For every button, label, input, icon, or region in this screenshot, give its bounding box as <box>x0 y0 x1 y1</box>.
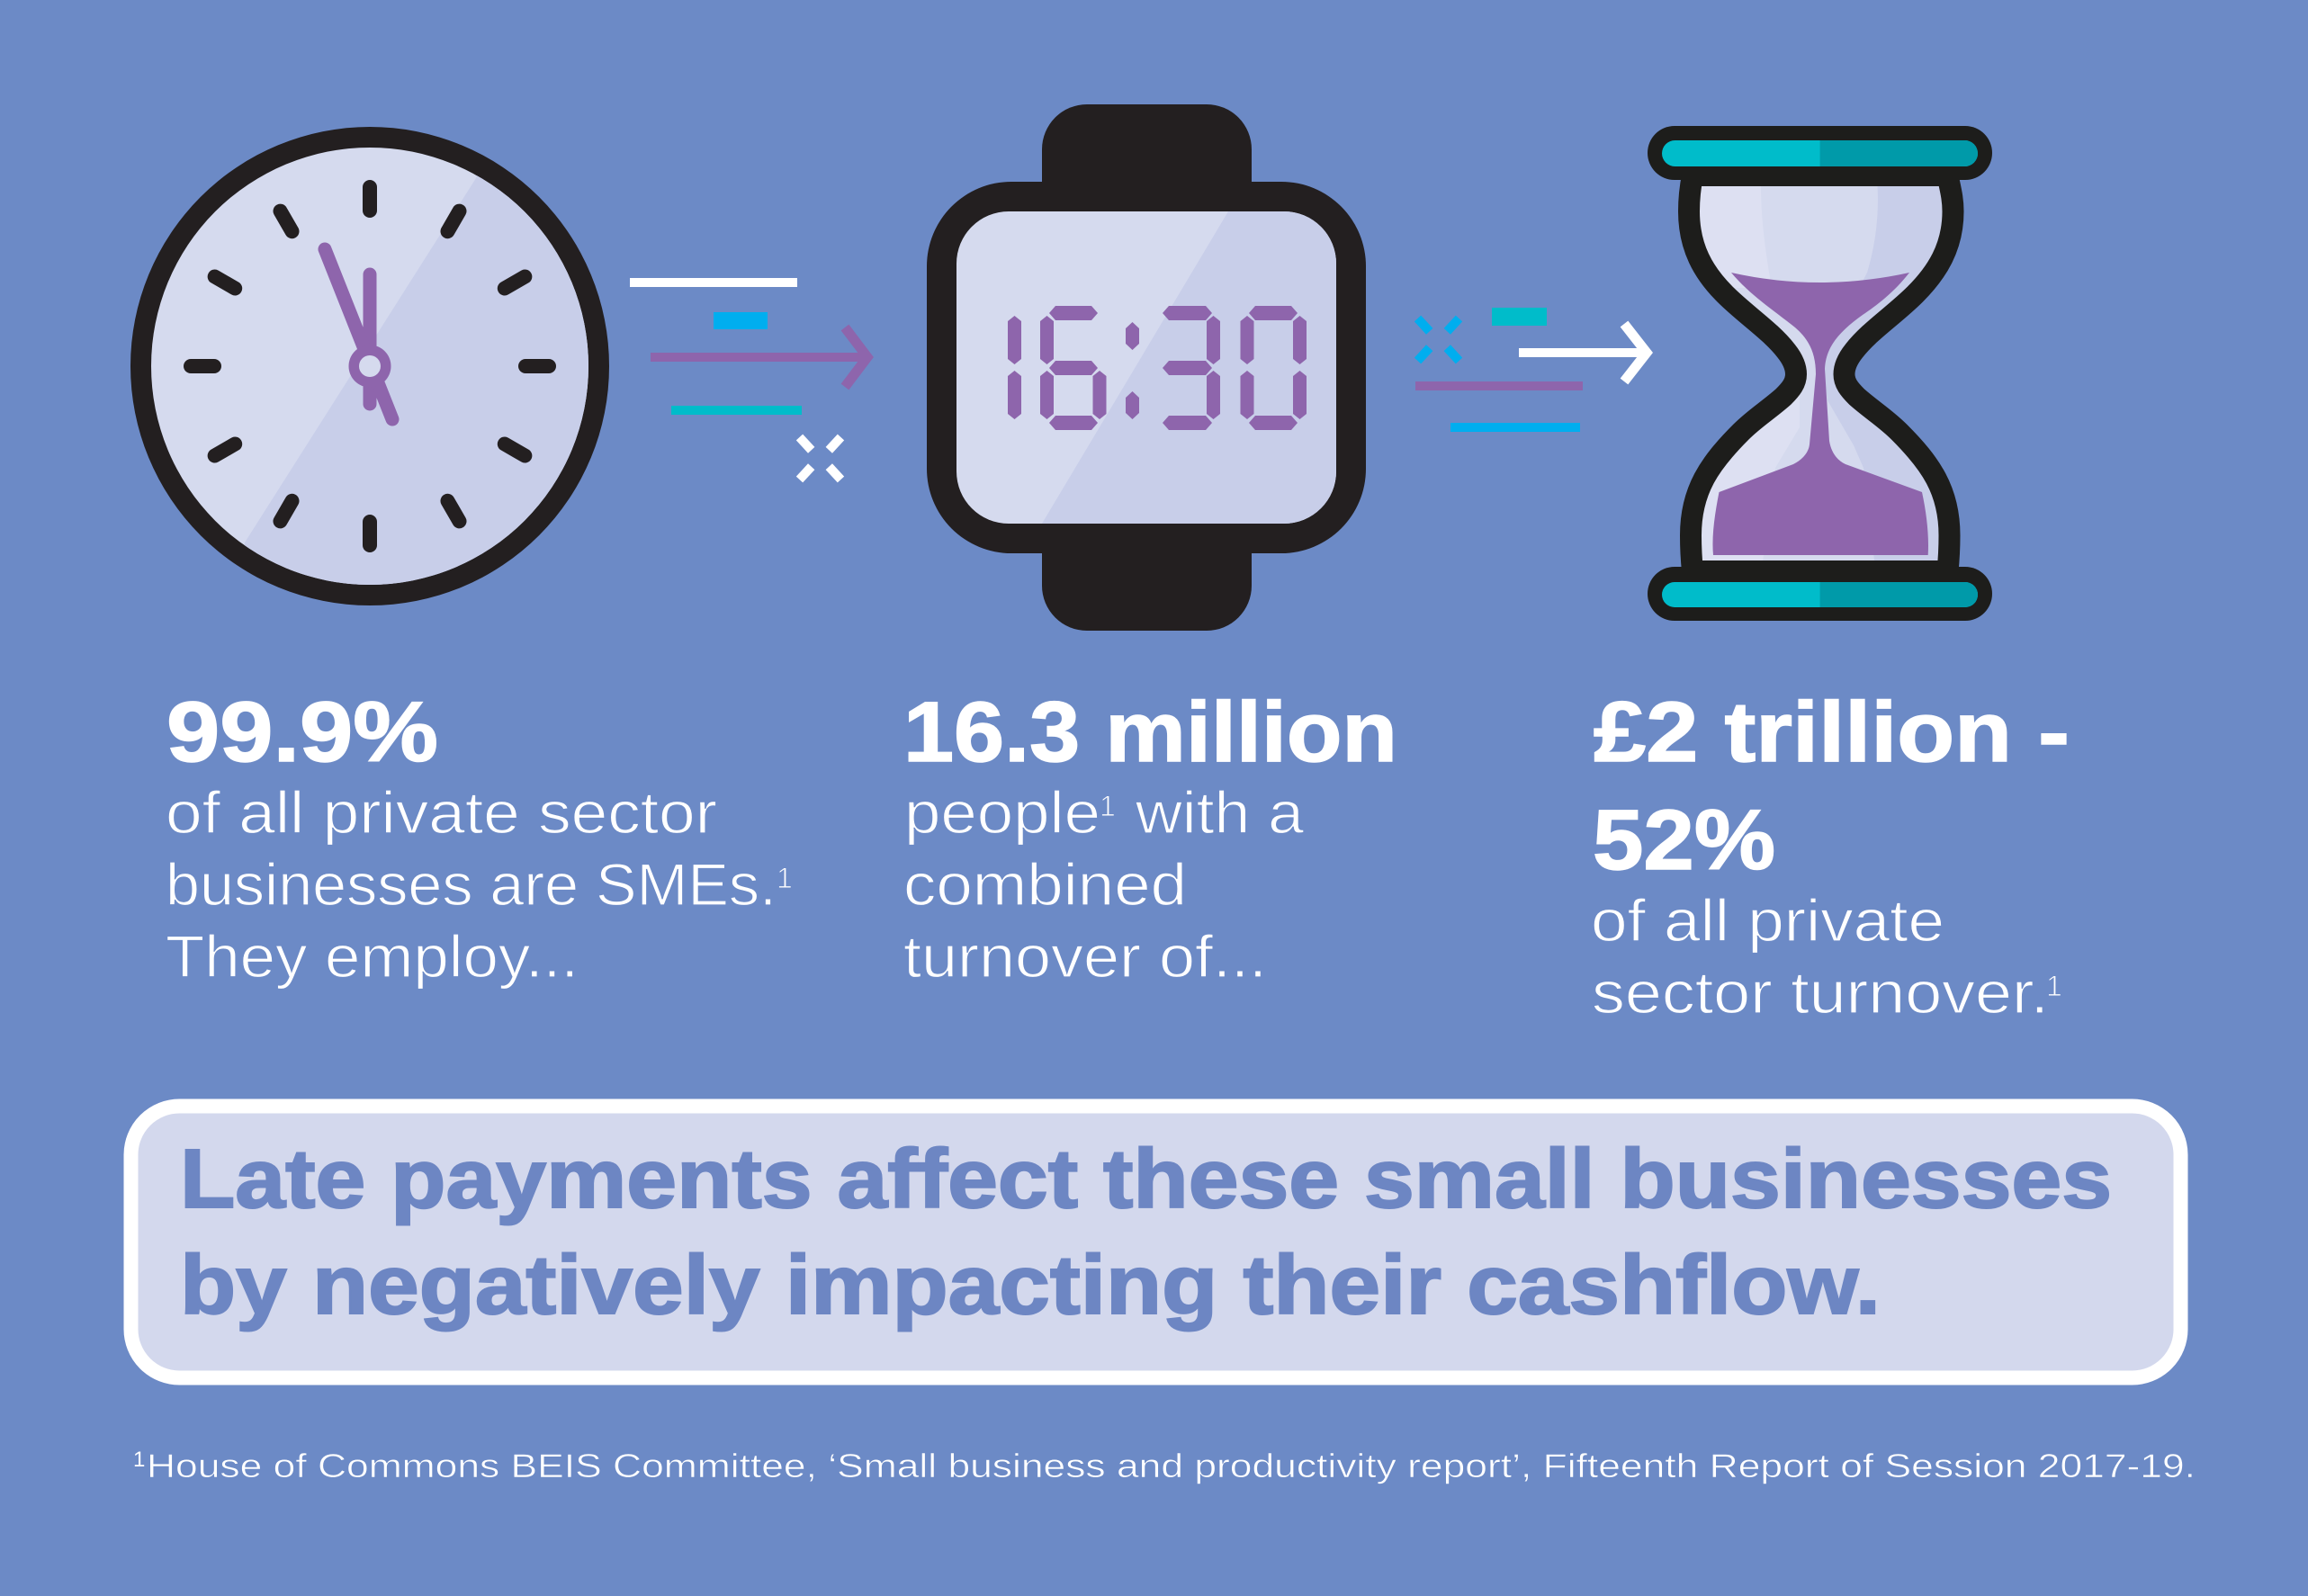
text block: turnover description <box>1591 887 2062 1026</box>
arrow: motion lines from watch to hourglass <box>1415 308 1648 432</box>
callout: late payments message: Late payments affect these small businesses <box>180 1132 2112 1225</box>
heading: 16.3 million: 16.3 million <box>903 685 1397 780</box>
panel: SME share <box>166 685 793 990</box>
text block: employment description: people <box>904 779 1100 846</box>
text block: employment description: turnover of... <box>903 923 1267 990</box>
text block: turnover description: sector turnover. <box>1592 959 2049 1026</box>
text block: SME description: They employ... <box>166 923 579 990</box>
icon: digital watch showing 16:30 <box>927 104 1366 631</box>
panel: turnover <box>1591 685 2070 1026</box>
text block: SME description: 1 <box>777 862 793 894</box>
text block: SME description: of all private sector <box>166 779 717 846</box>
callout: late payments message: by negatively impacting their cashflow. <box>180 1238 1881 1331</box>
text block: turnover description: 1 <box>2046 970 2062 1002</box>
infographic <box>124 104 2192 1484</box>
text block: employment description: 1 <box>1100 790 1116 822</box>
heading: £2 trillion - 52% <box>1593 685 2070 888</box>
text block: employment description <box>903 779 1304 990</box>
footnote: source: 1 <box>133 1448 145 1472</box>
icon: hourglass <box>1648 126 1992 621</box>
text block: employment description: with a <box>1135 779 1304 846</box>
callout: late payments message <box>131 1107 2181 1378</box>
text block: SME description: businesses are SMEs. <box>166 851 777 918</box>
heading: 99.9%: 99.9% <box>166 685 438 780</box>
icon: wall clock <box>130 127 609 605</box>
text block: turnover description: of all private <box>1591 887 1944 954</box>
heading: £2 trillion - 52%: £2 trillion - <box>1594 685 2070 780</box>
heading: £2 trillion - 52%: 52% <box>1593 793 1775 888</box>
footnote: source: House of Commons BEIS Committee, ‘Small business and productivity report’, Fifteenth Report of Session 2017-19. <box>147 1448 2196 1484</box>
arrow: motion lines from clock to watch <box>630 278 867 480</box>
panel: employment <box>903 685 1397 990</box>
text block: employment description: combined <box>903 851 1187 918</box>
text block: SME description <box>166 779 793 990</box>
